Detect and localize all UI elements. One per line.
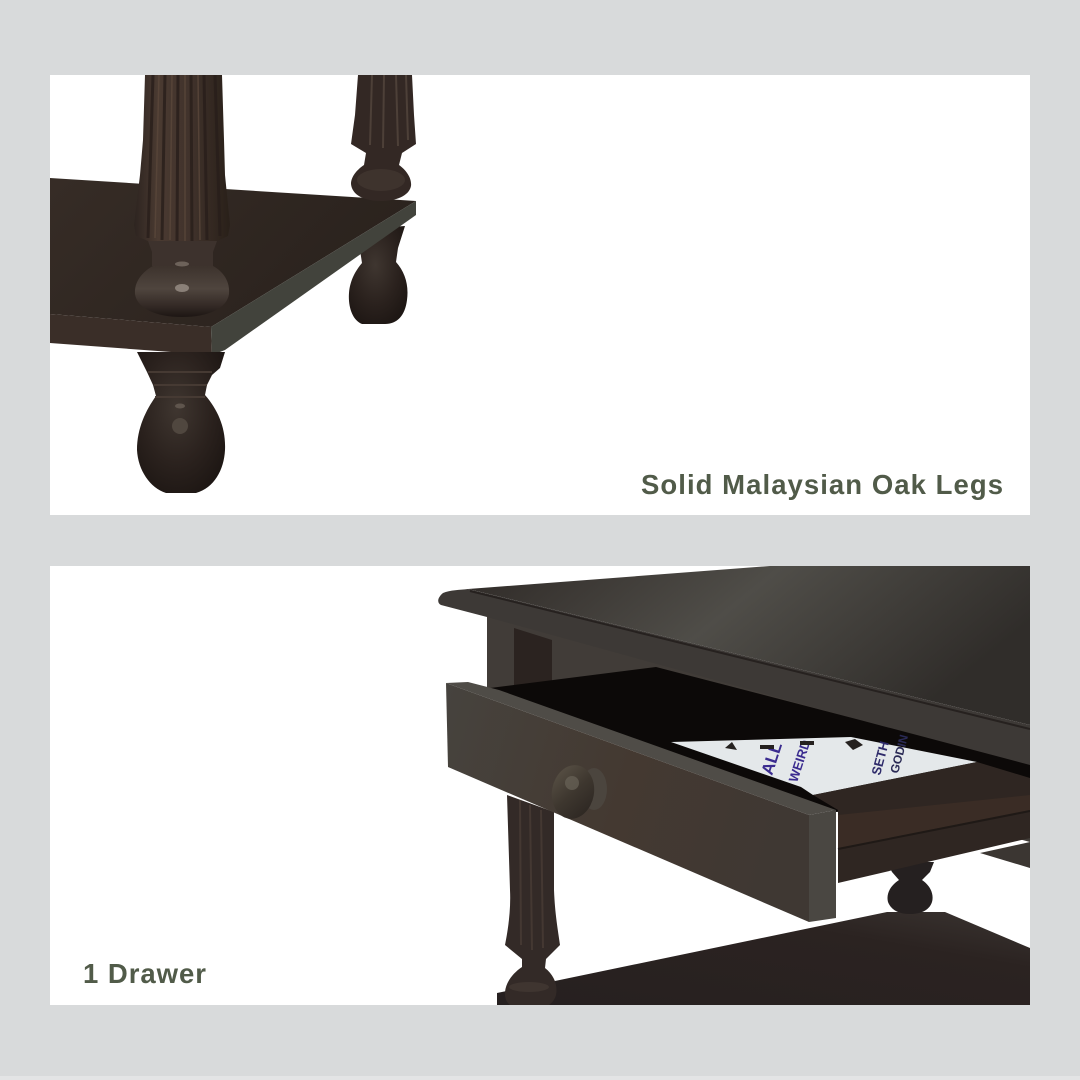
shelf front edge	[50, 314, 212, 355]
bottom edge line	[0, 1076, 1080, 1080]
photo: open drawer table	[438, 566, 1030, 1010]
panel background: drawer	[50, 566, 1030, 1005]
shelf top	[50, 178, 416, 327]
drawer grain band	[838, 795, 1030, 848]
collar	[148, 241, 217, 266]
book author SETH: SETH	[868, 739, 892, 777]
label: Solid Malaysian Oak Legs: Solid Malaysian Oak Legs	[641, 469, 1003, 500]
apron	[487, 610, 1030, 842]
collar highlight	[175, 262, 189, 266]
front leg lower foot	[137, 352, 225, 493]
front leg upper fluted	[134, 75, 230, 317]
label: 1 Drawer: 1 Drawer	[83, 958, 206, 989]
flute highlights	[155, 75, 200, 241]
underside wedge	[980, 842, 1030, 868]
drawer interior	[490, 667, 1030, 812]
back leg upper	[351, 75, 416, 201]
table top moulded edge	[438, 589, 1030, 767]
shelf side edge	[211, 201, 416, 355]
panel background: legs	[50, 75, 1030, 515]
lower shelf	[50, 178, 416, 355]
book title WEIRD: WEIRD	[786, 738, 813, 784]
back leg foot	[349, 226, 408, 324]
table top surface	[468, 566, 1030, 725]
book in drawer	[671, 733, 977, 795]
drawer front	[446, 683, 809, 922]
front leg	[505, 795, 560, 1010]
book title ALL: ALL	[758, 740, 786, 777]
apron notch	[514, 628, 552, 690]
drawer knob	[548, 762, 607, 822]
rear leg knob	[887, 862, 934, 914]
photo: table legs and lower shelf	[50, 75, 416, 493]
drawer lower rail line	[838, 811, 1030, 849]
moulding line	[470, 591, 1030, 729]
drawer end face	[809, 810, 836, 922]
ball highlight	[175, 284, 189, 292]
panel: solid oak legs	[50, 75, 1030, 515]
drawer rim	[446, 682, 836, 815]
book author GODIN: GODIN	[887, 733, 911, 775]
knob stem	[581, 768, 607, 810]
fluted column	[134, 75, 230, 241]
book icons	[725, 739, 863, 750]
panel: drawer	[50, 566, 1030, 1010]
ball	[135, 266, 229, 317]
knob head	[548, 762, 598, 822]
knob highlight	[565, 776, 579, 790]
book cover	[671, 737, 977, 795]
flute grooves	[148, 75, 220, 241]
bottom shelf	[497, 912, 1030, 1005]
drawer side backing	[813, 762, 1030, 883]
